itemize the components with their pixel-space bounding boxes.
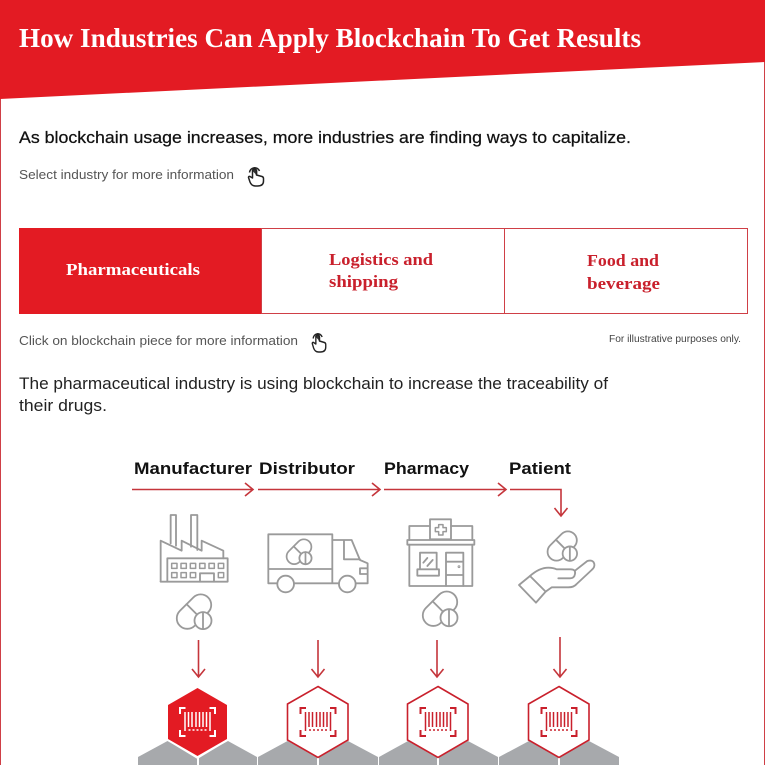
icon: factory — [161, 515, 228, 582]
icon: pill — [172, 590, 216, 633]
description text: their drugs. — [19, 396, 107, 415]
tab: food and beverage: beverage — [587, 274, 661, 293]
description text: The pharmaceutical industry is using blockchain to increase the traceability of — [19, 374, 608, 393]
label: manufacturer: Manufacturer — [134, 459, 252, 478]
grey blockchain hexagons — [138, 741, 619, 765]
tab: logistics and shipping: Logistics and — [329, 250, 434, 269]
tab: food and beverage — [504, 228, 748, 314]
icon: pill on truck — [283, 536, 315, 567]
tab: pharmaceuticals — [19, 228, 262, 314]
label: patient: Patient — [509, 459, 571, 478]
arrow: manufacturer to distributor — [132, 483, 253, 496]
tab: logistics and shipping: shipping — [329, 272, 399, 291]
icon: pointer hand — [248, 168, 264, 186]
arrow: to patient — [510, 490, 568, 516]
label: pharmacy: Pharmacy — [384, 459, 470, 478]
arrow: pharmacy to block — [430, 640, 444, 677]
icon: pill — [418, 587, 462, 630]
title: How Industries Can Apply Blockchain To Get Results — [19, 23, 641, 53]
block: patient hexagon — [528, 686, 589, 758]
instruction: click blockchain piece: Click on blockchain piece for more information — [19, 333, 298, 348]
icon: pill above hand — [544, 528, 581, 564]
disclaimer: For illustrative purposes only. — [609, 333, 741, 345]
icon: delivery truck — [268, 534, 368, 592]
header banner — [0, 0, 765, 99]
block: distributor hexagon — [288, 686, 348, 758]
icon: barcode — [180, 708, 215, 736]
instruction: select industry: Select industry for more information — [19, 167, 234, 182]
tab: food and beverage: Food and — [587, 251, 660, 270]
description text — [19, 374, 608, 415]
icon: open hand — [519, 561, 594, 603]
intro text: As blockchain usage increases, more industries are finding ways to capitalize. — [19, 128, 631, 147]
icon: barcode — [300, 708, 336, 736]
arrow: manufacturer to block — [192, 640, 205, 677]
tab: logistics and shipping — [262, 228, 504, 314]
icon: barcode — [420, 708, 456, 736]
arrow: pharmacy to patient — [384, 483, 506, 496]
arrow: distributor to pharmacy — [258, 483, 380, 496]
icon: pointer hand — [312, 334, 326, 352]
icon: barcode — [542, 708, 576, 736]
tab: pharmaceuticals: Pharmaceuticals — [66, 260, 201, 279]
label: distributor: Distributor — [259, 459, 355, 478]
block: manufacturer hexagon — [166, 686, 229, 759]
arrow: distributor to block — [312, 640, 324, 677]
arrow: patient to block — [554, 637, 566, 677]
industry tabs — [19, 228, 748, 314]
block: pharmacy hexagon — [408, 686, 468, 758]
icon: pharmacy — [407, 519, 474, 586]
